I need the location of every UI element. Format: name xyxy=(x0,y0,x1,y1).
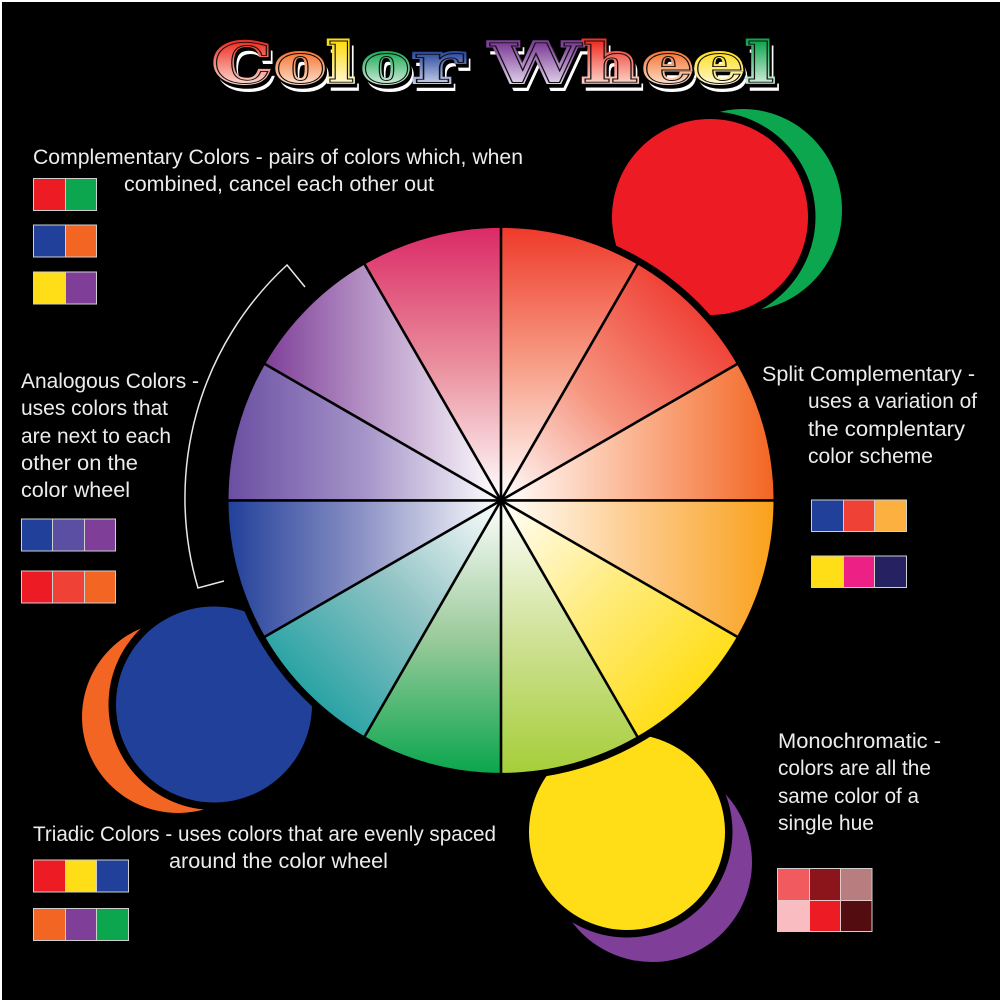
text: split complementary: Split Complementary - xyxy=(762,363,975,386)
title separation layer: r xyxy=(415,34,465,98)
text: monochromatic xyxy=(778,730,941,835)
swatches: split complementary xyxy=(812,500,906,588)
text: split complementary: color scheme xyxy=(808,445,933,468)
text: monochromatic: same color of a xyxy=(778,785,919,808)
title inner outline: C xyxy=(214,32,272,96)
title inner outline: e xyxy=(644,32,694,96)
title separation layer: h xyxy=(584,34,640,98)
text: split complementary xyxy=(762,363,977,468)
title coloured letters: W xyxy=(488,31,583,95)
title coloured letters xyxy=(213,31,774,95)
text: analogous colors xyxy=(21,370,199,502)
title inner outline: l xyxy=(328,32,354,96)
title shadow layer: e xyxy=(647,38,697,102)
title shadow layer: o xyxy=(279,38,329,102)
title separation layer: W xyxy=(490,34,585,98)
title coloured letters: r xyxy=(413,31,463,95)
title separation layer: C xyxy=(215,34,273,98)
text: complementary colors: Complementary Colors - pairs of colors which, when xyxy=(33,146,523,169)
title inner outline: h xyxy=(582,32,638,96)
title shadow layer: o xyxy=(366,38,414,102)
yellow and purple complementary circles xyxy=(522,726,752,962)
title inner outline xyxy=(214,32,774,96)
title separation layer xyxy=(215,34,776,98)
title coloured letters: e xyxy=(643,31,693,95)
blue and orange complementary circles xyxy=(82,599,320,813)
title inner outline: e xyxy=(694,32,744,96)
red and green complementary circles xyxy=(604,109,842,322)
title separation layer: l xyxy=(748,34,776,98)
text: complementary colors: combined, cancel each other out xyxy=(124,173,434,196)
title coloured letters: o xyxy=(275,31,325,95)
text: analogous colors: color wheel xyxy=(21,479,130,502)
text: triadic colors xyxy=(33,823,496,873)
title shadow layer xyxy=(217,38,778,102)
title coloured letters: e xyxy=(694,31,744,95)
color wheel xyxy=(222,221,780,780)
title shadow layer: W xyxy=(492,38,587,102)
title separation layer: o xyxy=(277,34,327,98)
text: analogous colors: Analogous Colors - xyxy=(21,370,199,393)
title inner outline: o xyxy=(276,32,326,96)
text: triadic colors: around the color wheel xyxy=(169,850,388,873)
swatches: analogous xyxy=(22,519,116,603)
title coloured letters: l xyxy=(746,31,774,95)
title separation layer: e xyxy=(645,34,695,98)
title shadow layer: e xyxy=(698,38,748,102)
title separation layer: e xyxy=(696,34,746,98)
title inner outline: r xyxy=(414,32,463,96)
analogous bracket arc xyxy=(185,265,305,588)
title coloured letters: o xyxy=(362,31,410,95)
title shadow layer: h xyxy=(586,38,642,102)
title inner outline: W xyxy=(489,32,584,96)
text: analogous colors: other on the xyxy=(21,452,138,475)
swatches: complementary xyxy=(34,178,96,304)
text: triadic colors: Triadic Colors - uses colors that are evenly spaced xyxy=(33,823,496,846)
text: monochromatic: Monochromatic - xyxy=(778,730,941,753)
text: monochromatic: single hue xyxy=(778,812,874,835)
text: split complementary: uses a variation of xyxy=(808,390,977,413)
title shadow layer: l xyxy=(750,38,778,102)
title inner outline: o xyxy=(362,32,410,96)
title separation layer: o xyxy=(364,34,412,98)
swatches: triadic xyxy=(34,860,128,940)
title xyxy=(213,31,778,102)
title coloured letters: l xyxy=(327,31,354,95)
title shadow layer: r xyxy=(417,38,467,102)
swatches: monochromatic xyxy=(778,868,872,932)
title separation layer: l xyxy=(329,34,356,98)
title inner outline: l xyxy=(746,32,774,96)
text: analogous colors: uses colors that xyxy=(21,397,168,420)
text: analogous colors: are next to each xyxy=(21,425,171,448)
text: monochromatic: colors are all the xyxy=(778,757,931,780)
text: split complementary: the complentary xyxy=(808,418,966,441)
text: complementary colors xyxy=(33,146,523,196)
title coloured letters: C xyxy=(213,31,271,95)
title shadow layer: C xyxy=(217,38,275,102)
title coloured letters: h xyxy=(582,31,638,95)
title shadow layer: l xyxy=(331,38,358,102)
